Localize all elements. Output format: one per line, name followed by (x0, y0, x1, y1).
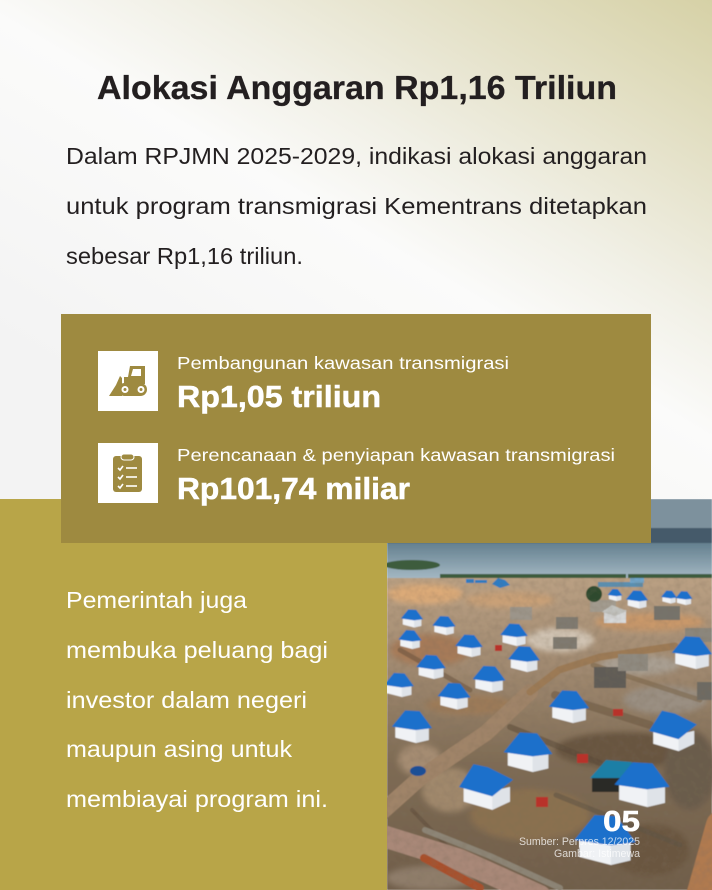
title: Alokasi Anggaran Rp1,16 Triliun (97, 69, 617, 106)
photo: trenches and embankments (400, 650, 700, 870)
photo: construction ground (387, 578, 712, 890)
text block: intro paragraph: sebesar Rp1,16 triliun. (66, 243, 303, 269)
icon: clipboard checklist (98, 443, 158, 503)
photo: red water tanks (495, 645, 623, 807)
icon: bulldozer (98, 351, 158, 411)
source credit: Gambar: Istimewa (554, 848, 641, 860)
text: planning label: Perencanaan & penyiapan kawasan transmigrasi (177, 445, 615, 465)
photo: blue-roofed houses, middle rows (384, 589, 712, 710)
photo: tree (586, 586, 602, 602)
photo: sandy and earth patches (386, 584, 712, 890)
text block: investor paragraph: membiayai program ini. (66, 786, 328, 812)
text block: intro paragraph: Dalam RPJMN 2025-2029, indikasi alokasi anggaran (66, 143, 647, 169)
text: planning amount: Rp101,74 miliar (177, 471, 410, 506)
photo: sky and far hills (387, 499, 712, 544)
text: development label: Pembangunan kawasan transmigrasi (177, 353, 509, 373)
text block: investor paragraph (66, 587, 328, 812)
background: olive lower block (0, 499, 387, 890)
photo: blue-roofed houses, foreground (392, 690, 697, 865)
page number: 05 (603, 806, 640, 838)
photo: ground grain (387, 578, 712, 890)
photo: unfinished grey buildings (510, 600, 712, 700)
text block: investor paragraph: maupun asing untuk (66, 736, 292, 762)
text block: investor paragraph: investor dalam negeri (66, 687, 307, 713)
text block: intro paragraph: untuk program transmigrasi Kementrans ditetapkan (66, 193, 647, 219)
photo: far row of houses (466, 578, 644, 588)
text: development amount: Rp1,05 triliun (177, 379, 381, 414)
photo: sea (387, 543, 712, 579)
photo: aerial view of transmigration housing (380, 499, 712, 890)
text block: intro paragraph (66, 143, 647, 269)
text block: investor paragraph: membuka peluang bagi (66, 637, 328, 663)
source credit: Sumber: Perpres 12/2025 (519, 836, 640, 848)
source credit (519, 836, 641, 860)
panel: budget allocation (61, 314, 651, 543)
photo: dirt roads (380, 646, 712, 890)
text block: investor paragraph: Pemerintah juga (66, 587, 248, 613)
photo: blue car (410, 766, 426, 776)
photo: white-roof house (602, 605, 627, 623)
photo: shoreline greenery (384, 560, 712, 579)
